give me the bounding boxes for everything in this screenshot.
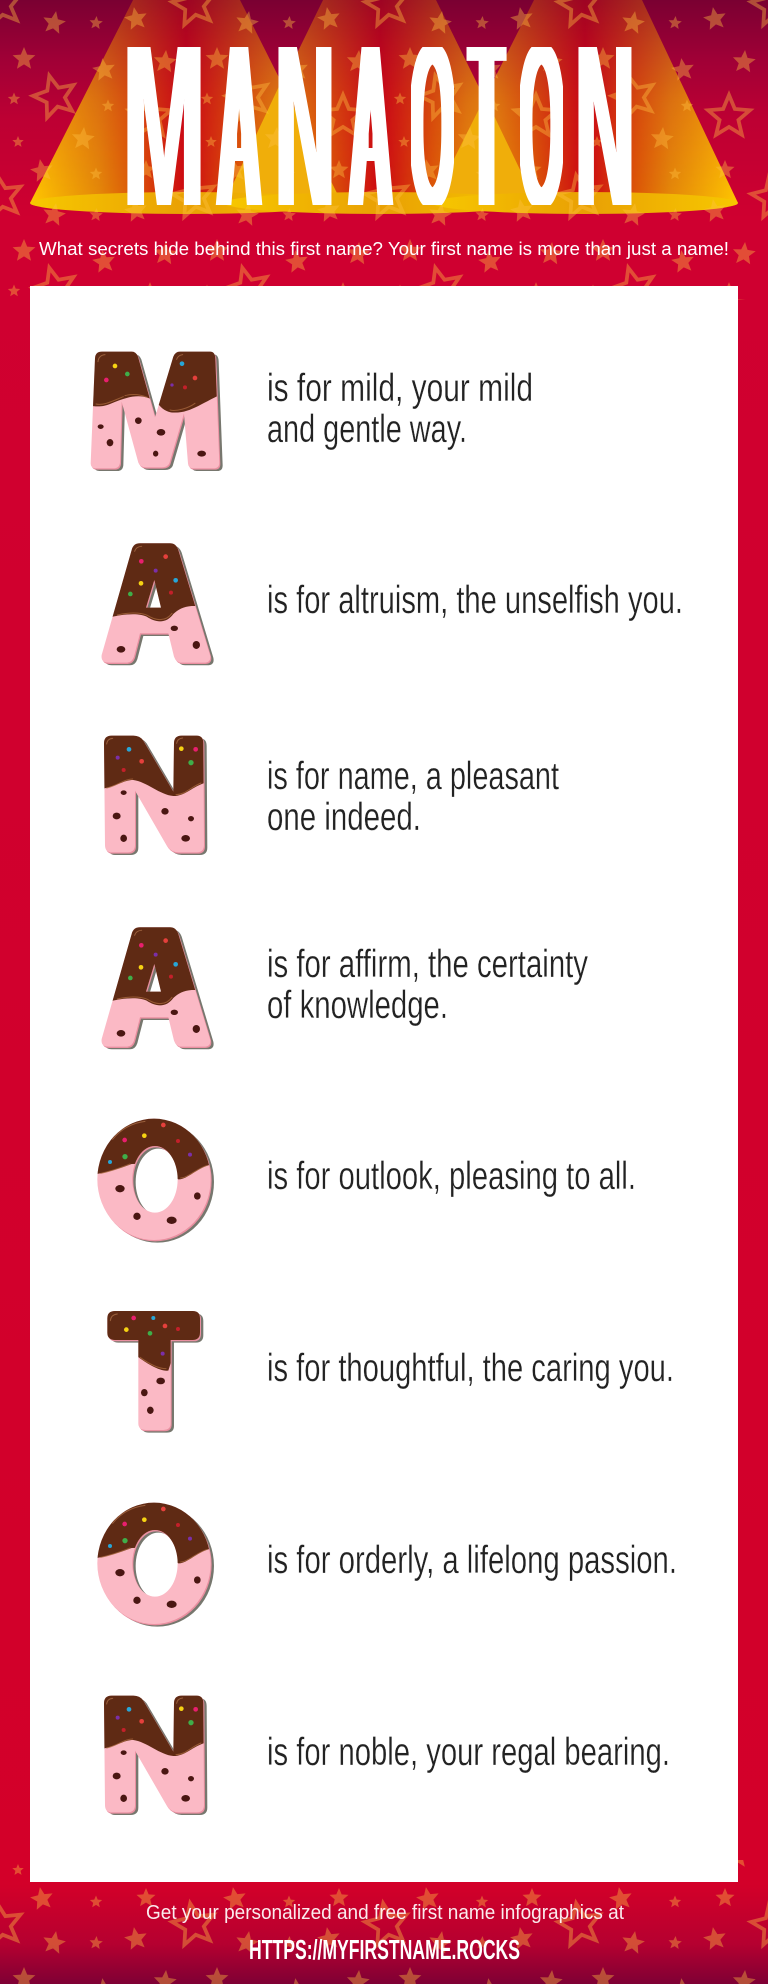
text: second A line: of knowledge. [267, 984, 448, 1027]
text: M line: and gentle way. [267, 408, 467, 451]
icon: chocolate letter T [107, 1311, 203, 1433]
footer url: HTTPS://MYFIRSTNAME.ROCKS [249, 1934, 520, 1965]
icon: chocolate letter O [97, 1503, 214, 1627]
text: M line: is for mild, your mild [267, 367, 533, 410]
icon: chocolate letter A [102, 927, 214, 1049]
text: N line [267, 755, 559, 839]
spotlight cones [30, 0, 738, 214]
icon: chocolate letter N [104, 1696, 207, 1815]
subtitle: What secrets hide behind this first name? Your first name is more than just a name! [39, 238, 729, 259]
text: second A line: is for affirm, the certainty [267, 943, 588, 986]
panel: white content area [30, 286, 738, 1882]
icon: chocolate letter N [104, 736, 207, 855]
footer text: Get your personalized and free first name infographics at [146, 1902, 624, 1924]
icon: chocolate letter A [102, 543, 214, 665]
icon: chocolate letter O [97, 1119, 214, 1243]
title [127, 47, 632, 205]
text: N line: is for name, a pleasant [267, 755, 559, 798]
text: O line: is for outlook, pleasing to all. [267, 1155, 636, 1198]
top star pattern [0, 0, 768, 300]
bottom star pattern [0, 1860, 768, 1984]
text: N line: one indeed. [267, 796, 421, 839]
text: second A line [267, 943, 588, 1027]
icon: chocolate letter M [91, 352, 223, 471]
text: M line [267, 367, 533, 451]
